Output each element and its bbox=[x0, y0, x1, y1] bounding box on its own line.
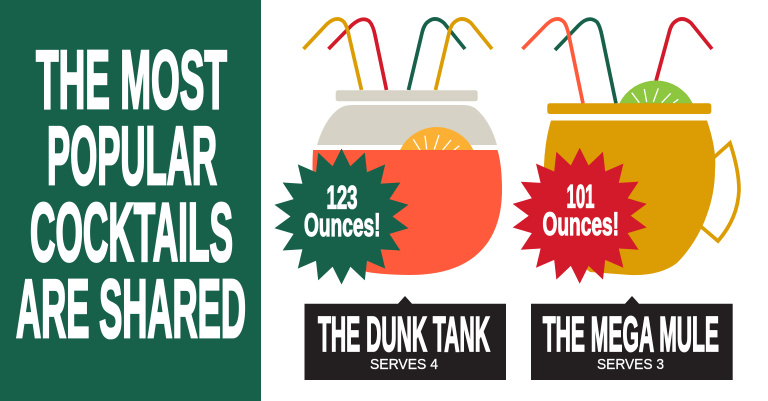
panel: title: THE MOST bbox=[36, 33, 227, 126]
callout: 101 ounces starburst: 101 bbox=[566, 178, 594, 214]
infographic canvas: THE DUNK TANK bbox=[318, 308, 490, 362]
straws in punch bowl bbox=[304, 19, 492, 90]
mug rim bbox=[547, 103, 711, 114]
label: The Dunk Tank serves 4 bbox=[304, 296, 506, 380]
orange slice bbox=[400, 127, 473, 150]
callout: 123 ounces starburst: Ounces! bbox=[304, 207, 380, 243]
mug handle bbox=[698, 143, 739, 241]
illustration: The Mega Mule copper mug bbox=[522, 19, 739, 275]
punch liquid bbox=[312, 150, 502, 275]
bowl rim bbox=[336, 90, 478, 101]
infographic canvas: COCKTAILS bbox=[30, 186, 233, 278]
panel: title: POPULAR bbox=[47, 109, 217, 202]
bowl upper glass bbox=[317, 105, 497, 145]
panel: title bbox=[0, 0, 261, 401]
illustration: The Dunk Tank punch bowl bbox=[304, 19, 502, 275]
callout: 123 ounces starburst: 123 bbox=[326, 180, 358, 216]
label: The Dunk Tank serves 4: SERVES 4 bbox=[370, 357, 438, 373]
label: The Mega Mule serves 3 bbox=[531, 296, 733, 380]
straws in mug bbox=[522, 19, 712, 104]
callout: 123 ounces starburst bbox=[274, 148, 408, 284]
mug body bbox=[544, 120, 715, 275]
heading: The most popular cocktails are shared bbox=[16, 33, 246, 355]
callout: 101 ounces starburst: Ounces! bbox=[542, 206, 619, 242]
lime slice bbox=[619, 81, 693, 104]
label: The Mega Mule serves 3: SERVES 3 bbox=[597, 357, 664, 373]
callout: 101 ounces starburst bbox=[513, 148, 647, 284]
infographic canvas: ARE SHARED bbox=[16, 262, 246, 355]
